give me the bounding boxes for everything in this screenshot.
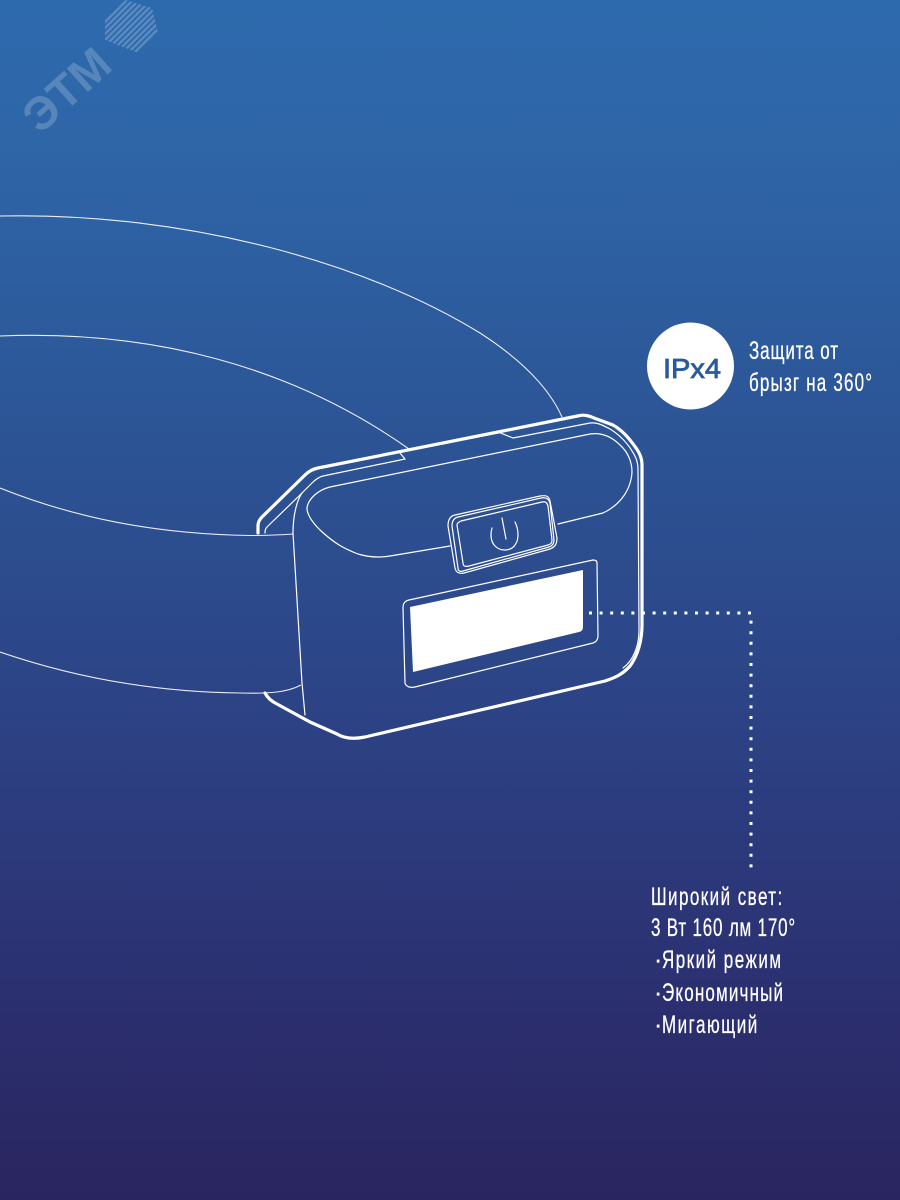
watermark wordmark: ЭТМ: [12, 37, 121, 142]
dotted leader line: [589, 613, 751, 870]
outer housing outline: [258, 415, 642, 738]
power button: [448, 496, 557, 573]
housing inner contour: [265, 453, 405, 533]
upper inset panel: [307, 434, 632, 557]
text: wide light specs and modes: Широкий свет:: [651, 883, 782, 911]
text: wide light specs and modes: ·: [654, 979, 662, 1007]
badge: IPx4: IPx4: [663, 353, 721, 384]
headlamp body: [258, 415, 642, 738]
badge: IPx4: [647, 322, 734, 410]
power icon: [491, 518, 518, 550]
head strap outlines: [0, 216, 562, 693]
text: wide light specs and modes: Экономичный: [662, 979, 783, 1007]
front face left edge: [293, 493, 305, 715]
watermark emblem: [105, 0, 158, 52]
lens frame: [403, 560, 598, 687]
text: wide light specs and modes: [651, 883, 795, 1039]
text: wide light specs and modes: Яркий режим: [662, 946, 781, 974]
LED lens: [410, 570, 583, 672]
text: wide light specs and modes: ·: [654, 1011, 662, 1039]
text: wide light specs and modes: Мигающий: [662, 1011, 757, 1039]
watermark: ETM logo: [24, 0, 158, 130]
text: wide light specs and modes: ·: [654, 946, 662, 974]
text: splash protection: [749, 337, 872, 397]
text: splash protection: брызг на 360°: [749, 369, 872, 397]
text: wide light specs and modes: 3 Вт 160 лм 170°: [651, 914, 795, 942]
text: splash protection: Защита от: [749, 337, 838, 365]
